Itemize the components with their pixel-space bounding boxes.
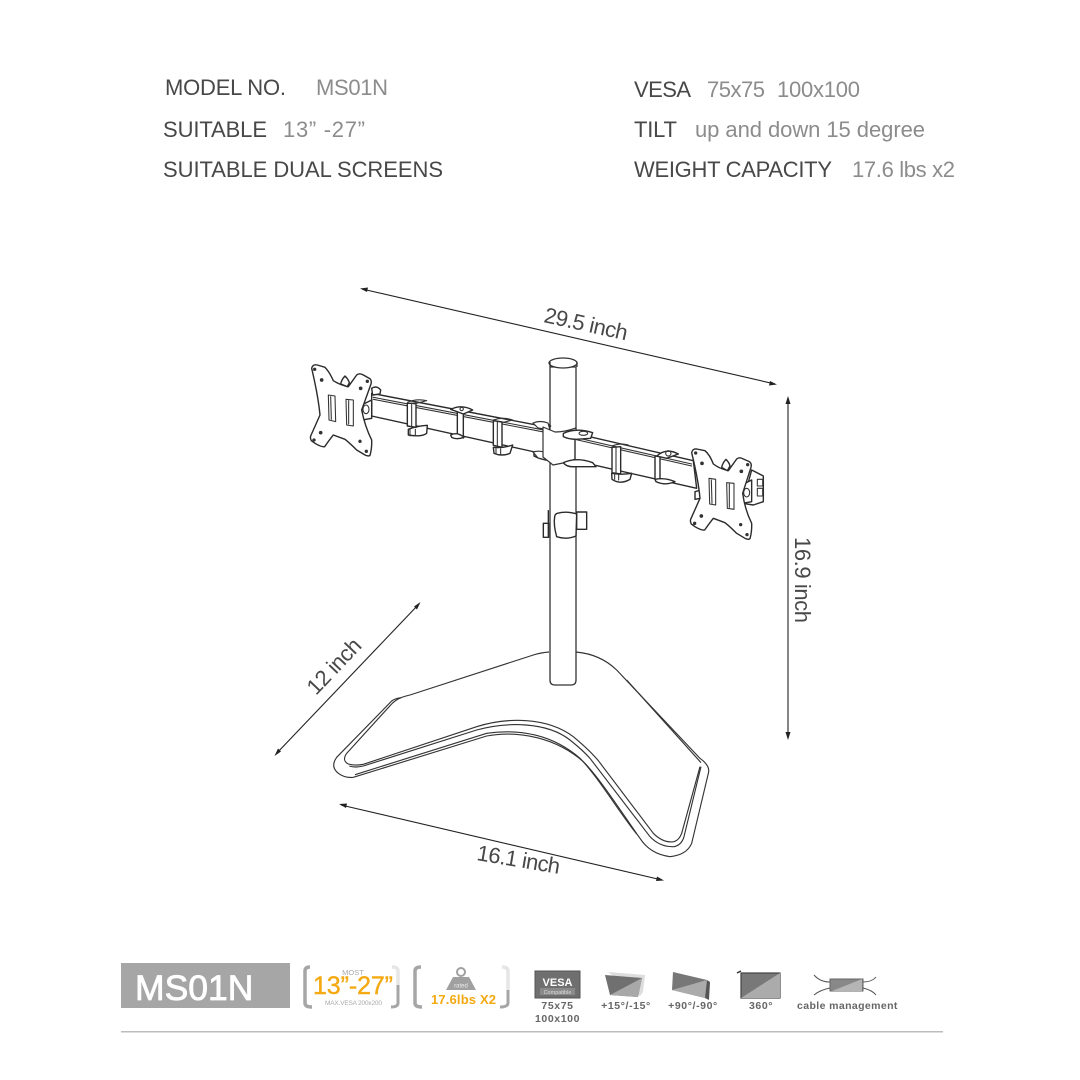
cable clip on pole [543, 511, 587, 538]
dimension: arm width 29.5 inch [360, 288, 777, 386]
icon: 360 degree [737, 971, 780, 1012]
back bracket [743, 470, 763, 505]
icon: rotate: +90°/-90° [668, 1000, 718, 1012]
icon: tilt: +15°/-15° [601, 1000, 651, 1012]
specifications: right column: 17.6 lbs x2 [852, 157, 955, 182]
icon: VESA compatible: VESA [543, 977, 573, 989]
icon: 360 degree: 360° [749, 1000, 773, 1012]
right arm segments and VESA plate [563, 430, 763, 539]
icon: tilt [601, 972, 651, 1012]
specifications: left column: MS01N [316, 75, 388, 100]
icon: VESA compatible [535, 971, 580, 1025]
icon: VESA compatible: 75x75 [541, 1000, 574, 1012]
dimension: depth 12 inch: 12 inch [301, 633, 366, 699]
specifications: right column: WEIGHT CAPACITY [634, 157, 832, 182]
VESA plate [310, 365, 372, 456]
specifications: left column: MODEL NO. [165, 75, 286, 100]
dimension: height 16.9 inch: 16.9 inch [790, 537, 815, 623]
hub tabs [563, 430, 593, 439]
swivel bolt [372, 387, 381, 395]
icon: cable management: cable management [797, 1000, 898, 1012]
icon: VESA compatible: 100x100 [535, 1013, 580, 1025]
left arm segments and VESA plate [310, 365, 551, 460]
screen size badge: MOST [342, 968, 364, 977]
icon: cable management [797, 975, 898, 1012]
specifications: right column: up and down 15 degree [695, 117, 925, 142]
pole of stand [549, 358, 577, 685]
bottom divider [121, 1031, 943, 1032]
central hub on pole [533, 422, 576, 465]
dimension: height 16.9 inch [786, 396, 815, 740]
dimension: depth 12 inch [274, 602, 420, 756]
model badge: MS01N [135, 968, 253, 1008]
joint clamps [612, 473, 632, 482]
specifications: right column [634, 77, 955, 182]
arm body [372, 393, 548, 455]
dimension: base width 16.1 inch: 16.1 inch [475, 840, 562, 879]
specifications: right column: VESA [634, 77, 691, 102]
screen size badge: 13”-27” [313, 972, 393, 1000]
weight capacity badge: rated [454, 984, 468, 990]
specifications: right column: 75x75 [707, 77, 765, 102]
screen size badge: MAX.VESA 200x200 [325, 1000, 382, 1007]
icon: rotate [668, 972, 718, 1012]
weight capacity badge [415, 967, 508, 1007]
icon: VESA compatible: Compatible [544, 990, 571, 996]
dimension: base width 16.1 inch [339, 804, 664, 881]
specifications: left column: SUITABLE DUAL SCREENS [163, 157, 443, 182]
specifications: left column [163, 75, 443, 182]
weight capacity badge: 17.6lbs X2 [431, 992, 496, 1007]
specifications: right column: 100x100 [777, 77, 860, 102]
model badge [121, 963, 290, 1008]
base of stand [334, 652, 709, 857]
specifications: left column: 13” -27” [283, 117, 365, 142]
specifications: left column: SUITABLE [163, 117, 267, 142]
dimension: arm width 29.5 inch: 29.5 inch [542, 302, 630, 345]
specifications: right column: TILT [634, 117, 677, 142]
screen size badge [305, 967, 398, 1007]
joint clamps [407, 400, 551, 460]
arm body [575, 433, 697, 488]
VESA plate [690, 449, 752, 539]
